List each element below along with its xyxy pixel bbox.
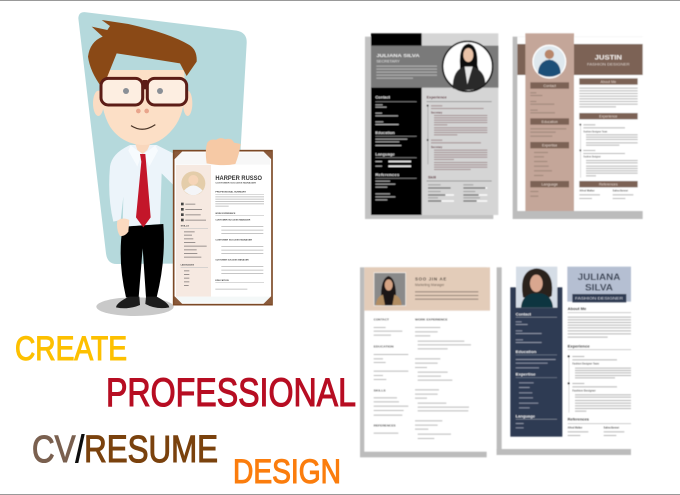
name: JULIANA SILVA	[376, 53, 420, 59]
resume: Justin fashion designer: Experience	[599, 115, 617, 119]
name panel: SILVA	[585, 282, 614, 292]
headings: WORK EXPERIENCE	[415, 319, 448, 321]
sidebar text: References	[375, 173, 399, 177]
sidebar text: Education	[516, 349, 537, 354]
resume: Justin fashion designer: FASHION DESIGNER	[587, 62, 630, 66]
hand	[206, 138, 241, 165]
portrait	[443, 41, 493, 91]
hair	[88, 20, 197, 87]
section bars	[530, 78, 638, 187]
sidebar text: Contact	[375, 95, 391, 99]
portrait	[533, 45, 566, 78]
name panel	[567, 267, 631, 302]
resume: Justin fashion designer: Salina Bennet	[613, 189, 628, 193]
resume sections: EDUCATION	[215, 279, 229, 282]
resume: Justin fashion designer: Language	[542, 183, 558, 187]
resume sections: CUSTOMER SUCCESS MANAGER	[215, 239, 252, 242]
sidebar text: Education	[375, 131, 395, 135]
resume sections	[181, 191, 252, 282]
shoes	[116, 297, 140, 308]
main column: References	[568, 418, 589, 422]
resume: Soo Jin Ae	[360, 267, 490, 457]
shirt	[109, 145, 175, 227]
resume: Justin fashion designer: About Me	[601, 80, 616, 84]
name panel: FASHION DESIGNER	[575, 297, 623, 301]
name panel: JULIANA	[578, 272, 621, 282]
neck	[134, 140, 152, 154]
main column: Experience	[427, 95, 447, 99]
resume sections: CUSTOMER SUCCESS MANAGER	[215, 219, 251, 222]
portrait	[516, 267, 557, 308]
ears	[93, 91, 104, 116]
legs	[121, 224, 164, 297]
name: JUSTIN	[595, 54, 622, 61]
illustration: man holding resume	[78, 12, 272, 316]
sidebar text: Expertise	[516, 372, 537, 377]
resume: Justin fashion designer: Expertise	[542, 144, 557, 148]
corner ornaments	[174, 151, 271, 304]
headings: REFERENCES	[374, 426, 396, 428]
resume: Justin fashion designer: Education	[542, 120, 558, 124]
resume: Juliana Silva black: Skill	[428, 176, 436, 180]
resume: Juliana Silva navy: Alfred Walker	[568, 425, 582, 429]
resume: Juliana Silva navy: Salina Bennet	[604, 425, 619, 429]
headings: CONTACT	[374, 318, 390, 321]
resume sections: PROFESSIONAL SUMMARY	[215, 191, 247, 194]
headline: create: CREATE	[15, 330, 127, 368]
sidebar text	[516, 311, 537, 418]
face	[100, 70, 185, 145]
sidebar text: Language	[375, 152, 395, 156]
resume sections: SKILLS	[181, 225, 190, 227]
glasses	[101, 78, 187, 105]
tie	[136, 154, 151, 227]
collar	[128, 145, 158, 167]
resume: Justin fashion designer: Fashion Designer	[583, 155, 601, 159]
headline: cv/resume: CV/RESUME	[32, 429, 218, 471]
resume held by man: CUSTOMER SUCCESS MANAGER	[215, 182, 257, 185]
resume: Juliana Silva black: SECRETARY	[376, 59, 401, 63]
ground shadow	[96, 297, 174, 316]
resume: Juliana Silva black: Secretary	[431, 145, 443, 149]
fist	[117, 218, 129, 236]
headings: SKILLS	[374, 390, 386, 392]
smile	[131, 125, 155, 129]
sidebar text: Contact	[516, 311, 532, 316]
resume sections: WORK EXPERIENCE	[215, 213, 236, 215]
resume: Justin fashion designer: Contact	[543, 84, 556, 88]
headings: EDUCATION	[374, 345, 394, 348]
resume: Juliana Silva navy: Fashion Designer Team	[572, 362, 600, 366]
resume sections: LANGUAGES	[181, 263, 195, 266]
resume: Justin fashion designer	[513, 33, 643, 219]
resume: Justin fashion designer: References	[599, 183, 618, 187]
main column: About Me	[568, 307, 586, 311]
main column	[568, 307, 590, 422]
resume name: HARPER RUSSO	[215, 175, 262, 182]
resume: Juliana Silva black: Secretary	[431, 110, 443, 114]
resume: Justin fashion designer: Alfred Walker	[579, 189, 595, 193]
portrait	[374, 273, 406, 306]
resume held by man	[174, 151, 272, 305]
headline: design: DESIGN	[233, 453, 341, 491]
resume: Juliana Silva black	[365, 33, 498, 219]
resume: Juliana Silva navy: Fashion Designer	[572, 389, 596, 393]
name: SOO JIN AE	[415, 277, 447, 282]
resume photo	[181, 171, 205, 195]
sidebar text	[375, 95, 399, 177]
teal background shape	[78, 12, 247, 264]
resume: Juliana Silva navy	[497, 267, 631, 455]
resume sections: CUSTOMER SUCCESS MANAGER	[215, 259, 249, 262]
headline: professional: PROFESSIONAL	[106, 371, 356, 415]
main column: Experience	[568, 344, 590, 348]
resume: Soo Jin Ae: Marketing Manager	[415, 283, 445, 287]
resume: Justin fashion designer: Fashion Designer Team	[583, 129, 608, 133]
sidebar text: Language	[516, 413, 536, 418]
headings	[374, 318, 448, 428]
nose	[136, 109, 149, 113]
